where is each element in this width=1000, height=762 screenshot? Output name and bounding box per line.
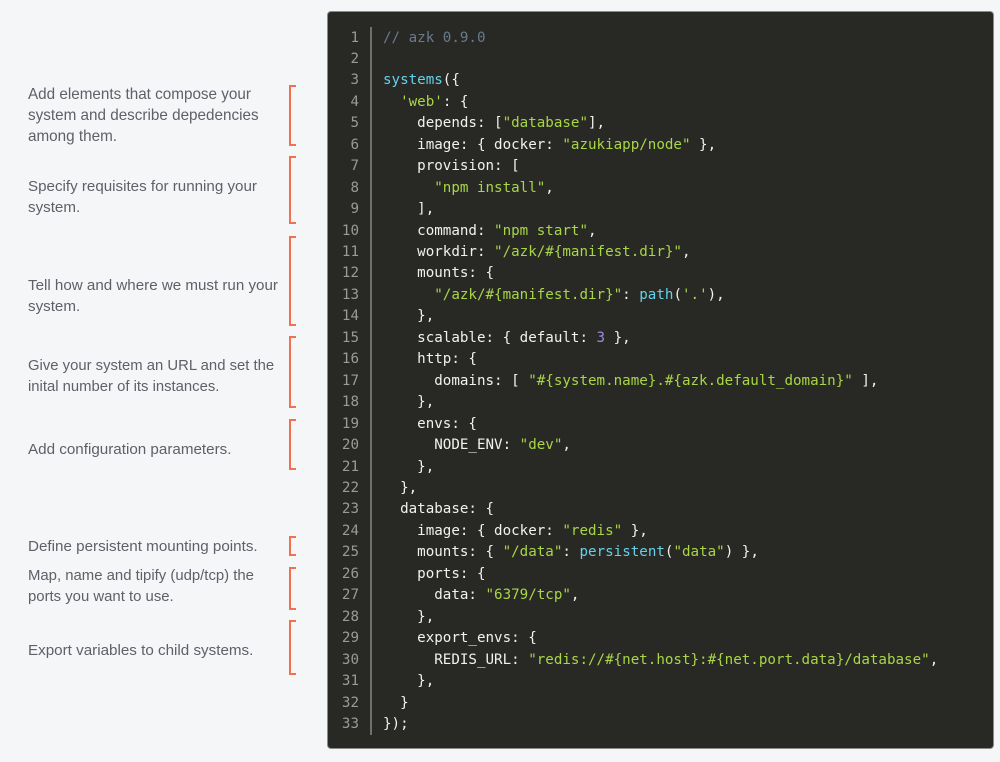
annotation: elements: among them.: [28, 128, 117, 145]
annotation: elements: Add elements that compose your: [28, 86, 251, 103]
annotation: URL and instances: inital number of its instances.: [28, 379, 219, 395]
annotation: ports: Map, name and tipify (udp/tcp) the: [28, 568, 254, 584]
gutter divider: [370, 27, 372, 735]
bracket: export variables: [289, 620, 296, 675]
annotation: how and where: system.: [28, 298, 80, 315]
annotation: ports: [28, 568, 254, 605]
annotation: requisites: [28, 178, 257, 216]
annotation: persistent mounts: Define persistent mounting points.: [28, 538, 258, 555]
annotation: ports: ports you want to use.: [28, 589, 174, 605]
line numbers: 1 2 3 4 5 6 7 8 9 10 11 12 13 14 15 16 17 18 19 20 21 22 23 24 25 26 27 28 29 30 31 32 33: [342, 30, 359, 732]
annotation: requisites: Specify requisites for running your: [28, 178, 257, 195]
annotation: URL and instances: [28, 358, 274, 395]
bracket: elements: [289, 85, 296, 146]
annotation: configuration: Add configuration parameters.: [28, 441, 231, 458]
bracket: requisites: [289, 156, 296, 224]
annotation: how and where: [28, 277, 278, 315]
annotation: URL and instances: Give your system an URL and set the: [28, 358, 274, 374]
bracket: persistent mounts: [289, 536, 296, 556]
bracket: how and where: [289, 236, 296, 326]
bracket: configuration: [289, 419, 296, 470]
annotation: requisites: system.: [28, 199, 80, 216]
annotation: elements: system and describe depedencies: [28, 107, 259, 124]
bracket: URL and instances: [289, 336, 296, 408]
code listing: // azk 0.9.0 systems({ 'web': { depends: ["database"], image: { docker: "azukiapp/node" }, provision: [ "npm install", ], command: "npm start", workdir: "/azk/#{manifest.dir}", mounts: { "/azk/#{manifest.dir}": path('.'), }, scalable: { default: 3 }, http: { domains: [ "#{system.name}.#{azk.default_domain}" ], }, envs: { NODE_ENV: "dev", }, }, database: { image: { docker: "redis" }, mounts: { "/data": persistent("data") }, ports: { data: "6379/tcp", }, export_envs: { REDIS_URL: "redis://#{net.host}:#{net.port.data}/database", }, } });: [383, 30, 938, 732]
annotation: export variables: Export variables to child systems.: [28, 642, 253, 659]
bracket: ports: [289, 567, 296, 610]
annotation: how and where: Tell how and where we must run your: [28, 277, 278, 294]
annotation: elements: [28, 86, 259, 145]
panel: code editor: [328, 12, 993, 748]
